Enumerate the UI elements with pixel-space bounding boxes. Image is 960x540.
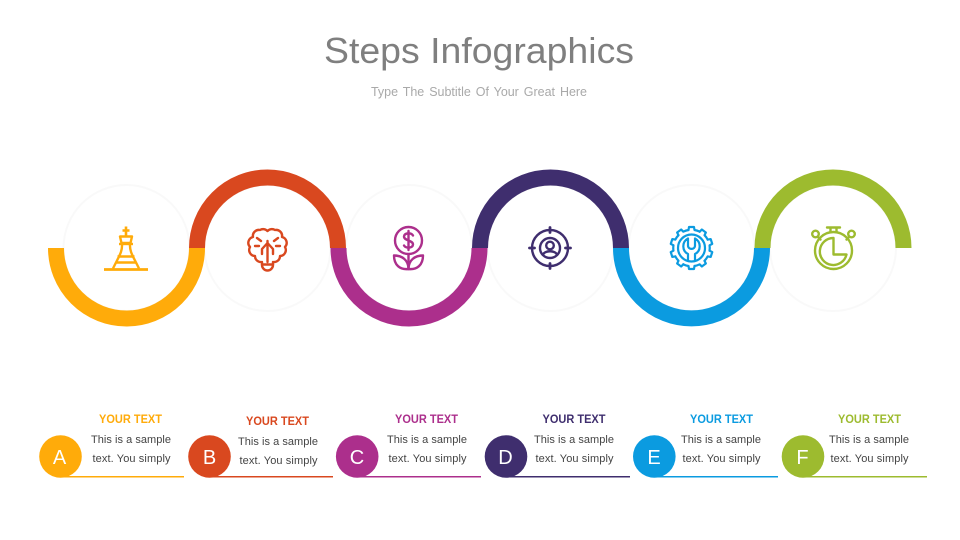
icon: target person [530, 228, 570, 268]
step A label: text. You simply [92, 453, 171, 465]
step D label: D [498, 447, 513, 469]
step A label: YOUR TEXT [99, 412, 163, 426]
icon: stopwatch [812, 228, 855, 269]
step C label [336, 412, 481, 478]
step B label [188, 414, 333, 478]
step F label: This is a sample [829, 434, 909, 446]
title: Steps Infographics [324, 30, 634, 71]
step E label: E [647, 447, 661, 469]
step C label: text. You simply [388, 453, 467, 465]
step D label: YOUR TEXT [542, 412, 606, 426]
step E label [633, 412, 778, 478]
icon: brain bulb [248, 229, 287, 270]
step A label [39, 412, 184, 478]
icon: chess king [104, 226, 148, 270]
step D label: text. You simply [536, 453, 614, 465]
step B label: YOUR TEXT [246, 414, 310, 428]
step F label: text. You simply [830, 453, 909, 465]
icon: gear wrench [669, 226, 714, 270]
step A label: This is a sample [91, 434, 171, 446]
step C label: YOUR TEXT [395, 412, 459, 426]
step E label: text. You simply [682, 453, 761, 465]
step A label: A [53, 447, 67, 469]
step B label: B [203, 447, 216, 469]
icon: money flower [394, 227, 423, 269]
step E label: This is a sample [681, 434, 761, 446]
step E label: YOUR TEXT [690, 412, 754, 426]
step F label: F [796, 447, 809, 469]
step C label: This is a sample [387, 434, 467, 446]
subtitle: Type The Subtitle Of Your Great Here [371, 85, 587, 99]
step B label: This is a sample [238, 436, 318, 448]
wave ribbon [56, 178, 904, 318]
step C label: C [350, 447, 364, 469]
step B label: text. You simply [240, 455, 318, 467]
step D label [485, 412, 630, 478]
step D label: This is a sample [534, 434, 614, 446]
step circles [64, 185, 896, 311]
step F label [782, 412, 927, 478]
step F label: YOUR TEXT [838, 412, 902, 426]
